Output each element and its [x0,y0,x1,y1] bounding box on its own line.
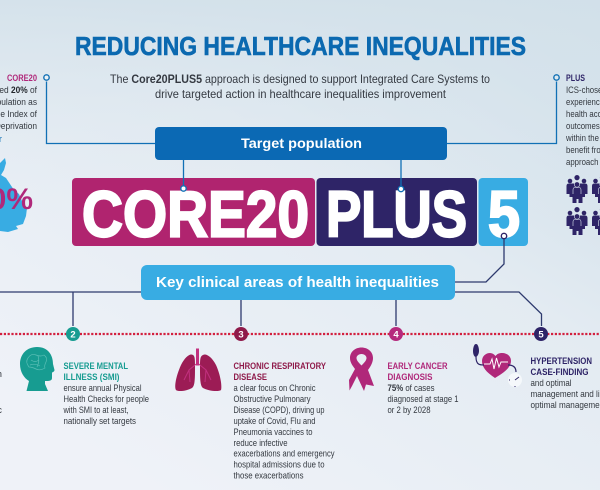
intro text: drive targeted action in healthcare inequalities improvement [155,87,447,101]
icon: groups of people [566,175,600,235]
item 3 heading: CHRONIC RESPIRATORY [234,361,326,372]
item 4 heading: DIAGNOSIS [388,372,433,383]
connector: target population to CORE20 block [181,160,186,191]
intro text [110,72,490,101]
5 block: 5 [488,178,520,250]
item 3 description: a clear focus on Chronic [234,382,316,393]
item 2 heading: ILLNESS (SMI) [64,372,120,383]
item 2 description [63,382,149,426]
item 3 description: Pneumonia vaccines to [234,426,312,437]
CORE20 description [0,85,38,131]
item 3 heading [234,361,326,383]
item 3 description: hospital admissions due to [234,458,324,470]
icon: heart with blood pressure cuff [473,344,522,387]
item 2 description: ensure annual Physical [64,382,142,393]
badge 4 [389,327,403,341]
PLUS block: PLUS [326,178,467,250]
item 5 heading [530,356,592,378]
item 4: early cancer diagnosis [388,361,458,415]
item 2 description: nationally set targets [64,415,136,426]
icon: awareness ribbon [349,348,374,391]
badge 5: 5 [538,330,544,340]
item 3 description: reduce infective [234,437,288,448]
item 2 heading: SEVERE MENTAL [64,361,128,372]
target population bar: Target population [241,135,362,151]
item 4 description: or 2 by 2028 [388,404,430,415]
item 3 heading: DISEASE [234,372,267,383]
item 2: severe mental illness [63,361,149,426]
key clinical areas bar [141,265,455,300]
connector: key clinical areas to numbered items [0,292,542,326]
badge 4: 4 [393,330,399,340]
PLUS description: approach [566,156,599,167]
connector: target population to PLUS note [447,82,556,144]
connector node: PLUS note [554,75,559,80]
icon: UK map with 20 percent [0,158,33,232]
item 3 description [234,382,335,480]
key clinical areas bar: Key clinical areas of health inequalities [156,274,439,291]
dotted timeline [0,333,600,335]
icon: head with brain [20,347,54,391]
badge 2: 2 [70,330,76,340]
CORE20 heading: CORE20 [7,73,37,83]
item 5 heading: CASE-FINDING [530,367,588,378]
badge 5 [534,327,548,341]
badge 2 [66,327,80,341]
connector: 5 block to key clinical areas [455,233,507,282]
panel: CORE20 note [0,73,38,144]
intro text: The Core20PLUS5 approach is designed to support Integrated Care Systems to [110,72,490,86]
badge 3 [234,327,248,341]
item 5: hypertension case-finding [530,356,600,410]
item 2 heading [64,361,128,383]
clipped text from item 1 [0,368,2,415]
item 4 description: diagnosed at stage 1 [388,393,458,404]
icon: lungs [175,348,221,391]
item 2 description: with SMI to at least, [63,404,129,415]
item 3: chronic respiratory disease [234,361,335,480]
item 4 heading: EARLY CANCER [388,361,448,372]
connector node: CORE20 note [44,75,49,80]
title: REDUCING HEALTHCARE INEQUALITIES [75,33,526,61]
item 5 description [530,377,600,410]
PLUS heading: PLUS [566,73,585,83]
item 3 description: exacerbations and emergency [234,448,335,458]
item 5 description: and optimal [530,377,572,388]
connector: target population to PLUS block [398,160,404,192]
connector: target population to CORE20 note [46,82,155,144]
item 4 heading [388,361,448,383]
item 2 description: Health Checks for people [64,393,149,404]
target population bar [155,127,447,160]
item 3 description: uptake of Covid, Flu and [234,415,316,426]
panel: PLUS note [565,73,600,167]
item 3 description: those exacerbations [234,470,304,480]
item 4 description [388,382,458,415]
item 4 description: 75% of cases [388,382,435,393]
PLUS description [565,84,600,167]
CORE20 block: CORE20 [82,178,309,250]
item 3 description: Disease (COPD), driving up [234,404,324,415]
badge 3: 3 [238,330,244,340]
item 3 description: Obstructive Pulmonary [234,393,311,404]
